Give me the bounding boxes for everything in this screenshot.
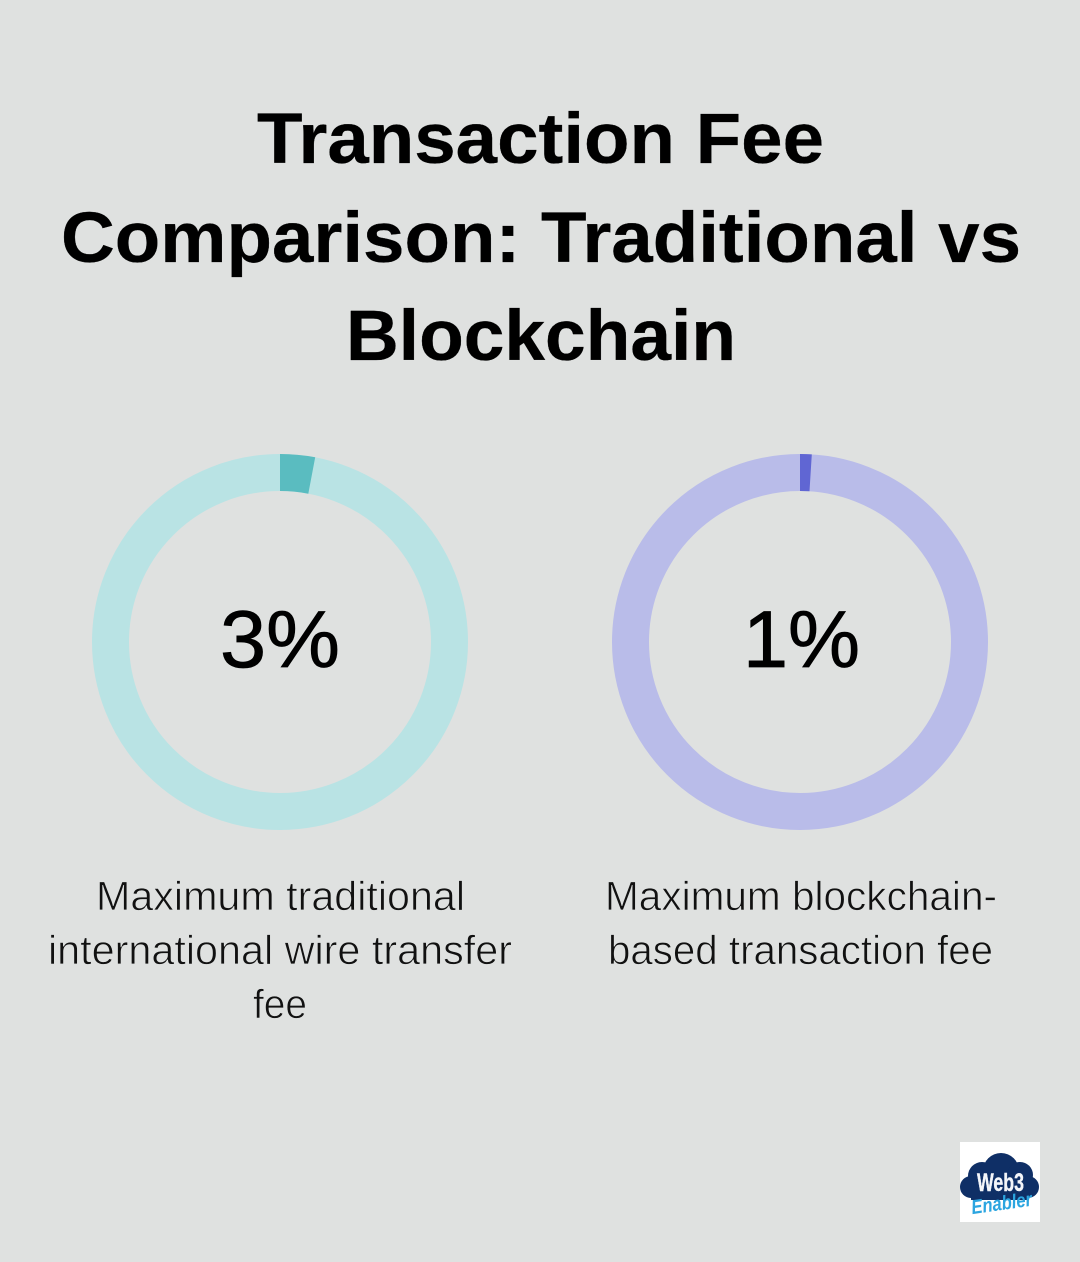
- title: Transaction Fee: [257, 100, 824, 179]
- logo: Web3 Enabler: [960, 1142, 1040, 1222]
- label: traditional fee: Maximum traditional: [96, 873, 465, 919]
- value: 1%: 1%: [743, 595, 860, 685]
- logo wordmark: Web3: Web3: [977, 1169, 1024, 1197]
- value: 3%: 3%: [220, 595, 340, 685]
- label: traditional fee: [48, 873, 512, 1027]
- donut chart: 3%: [110, 454, 450, 812]
- label: blockchain fee: Maximum blockchain-: [605, 873, 997, 919]
- title: Comparison: Traditional vs: [61, 199, 1021, 278]
- icon: cloud: [960, 1153, 1039, 1200]
- panel: traditional wire transfer fee: [48, 454, 512, 1027]
- label: traditional fee: international wire transfer: [48, 927, 512, 973]
- donut chart: 1%: [630, 454, 970, 812]
- label: blockchain fee: based transaction fee: [608, 927, 993, 973]
- logo wordmark: Enabler: Enabler: [970, 1189, 1034, 1219]
- title: Blockchain: [346, 297, 736, 376]
- panel: blockchain transaction fee: [605, 454, 997, 973]
- label: traditional fee: fee: [253, 981, 307, 1027]
- title: [61, 100, 1021, 376]
- label: blockchain fee: [605, 873, 997, 973]
